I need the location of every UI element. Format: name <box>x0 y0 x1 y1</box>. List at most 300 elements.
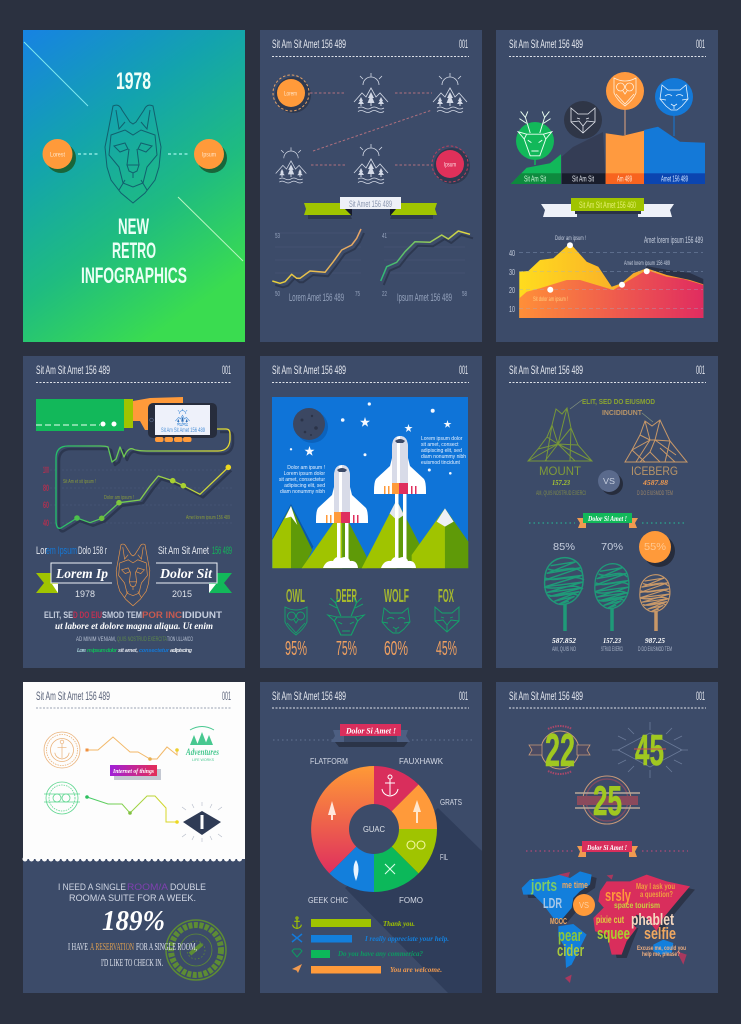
data points <box>547 242 650 293</box>
legend row: commerica: Do you have any commerica? <box>337 949 423 958</box>
typography: headline <box>44 610 222 621</box>
icon: feather <box>354 860 358 881</box>
ribbon heading <box>577 841 638 857</box>
word: MOOC: MOOC <box>550 917 567 926</box>
panel header <box>272 37 469 56</box>
dotted divider <box>529 522 686 524</box>
segment labels: GRATS <box>440 797 462 807</box>
chart grid <box>275 233 465 273</box>
typography: colored line: consectetur <box>139 648 170 654</box>
percentages: 45% <box>436 638 457 660</box>
percentages: 60% <box>384 638 408 660</box>
icon: wolf head <box>105 105 161 203</box>
area: yellow <box>519 243 703 318</box>
word: me time: me time <box>562 880 588 890</box>
text block left: Dolor am ipsum ! <box>287 465 325 471</box>
panel: rockets and animal percentages: 001 <box>459 363 468 377</box>
percentages: 75% <box>336 638 357 660</box>
panel: hand, cable chart and typography: 100 <box>43 465 49 475</box>
ribbon heading: Dolor Si Amet ! <box>587 515 627 523</box>
segment labels: FAUXHAWK <box>399 756 443 766</box>
tree captions: 157.23 <box>603 637 621 645</box>
heading left: Dolo 158 r <box>78 545 107 557</box>
badge: infinity <box>44 782 80 814</box>
typography: headline: POR INC <box>142 610 182 621</box>
axis labels <box>509 249 515 314</box>
axis labels: 80 <box>43 483 49 493</box>
bar: fox: Sit Am Sit <box>572 174 594 184</box>
text block left: diam nonummy nibh <box>280 489 325 495</box>
cover title: INFOGRAPHICS <box>81 263 187 288</box>
callout: left circle <box>42 139 76 173</box>
donut long shadow <box>345 808 482 993</box>
line chart: left <box>272 229 364 287</box>
typography: script line: ut labore et dolore magna aliqua. Ut enim <box>55 621 213 631</box>
text: reservation: FOR A SINGLE ROOM, <box>136 941 197 953</box>
heading right: 156 489 <box>212 545 232 557</box>
chart gridlines <box>50 470 232 523</box>
dotted divider <box>526 850 688 852</box>
ribbon heading: Sit Am Sit Amet 156 460 <box>579 200 636 210</box>
chart notes: Dolor am ipsum ! <box>104 495 134 501</box>
text: reservation: A RESERVATION <box>90 941 134 953</box>
panel: rockets and animal percentages: DEER <box>336 586 357 606</box>
segment labels: FIL <box>440 852 448 862</box>
chart labels: Ipsum Amet 156 489 <box>397 292 452 304</box>
word: squee: squee <box>597 924 630 943</box>
panel background <box>496 356 718 668</box>
text: reservation <box>68 941 197 969</box>
words: May I ask you: a question? <box>640 890 673 899</box>
legend row: appreciate: I really appreciate your help. <box>364 934 449 943</box>
panel header: Sit Am Sit Amet 156 489 <box>272 37 346 51</box>
ribbon heading <box>304 197 437 219</box>
panel: mountain flow and line charts: 001 <box>459 37 468 51</box>
chart gridlines <box>519 253 703 308</box>
cable line <box>56 429 230 528</box>
panel background <box>496 682 718 993</box>
chart labels: 75 <box>355 291 360 298</box>
chart notes: Amet lorem ipsum 156 489 <box>186 515 230 521</box>
label: mount: AM, QUIS NOSTRUD EXERCI <box>536 491 586 497</box>
axis labels: 10 <box>509 305 515 314</box>
panel header <box>36 689 232 708</box>
bar: wolf <box>644 78 705 184</box>
bar: fox <box>562 101 606 184</box>
panel background <box>23 682 245 993</box>
hand <box>133 397 183 430</box>
panel header: Sit Am Sit Amet 156 489 <box>36 363 110 377</box>
bar: owl: Am 489 <box>617 174 632 184</box>
versus badge <box>573 894 595 916</box>
segment: fauxhawk <box>374 766 418 829</box>
ribbon heading: Sit Amet 156 489 <box>349 199 392 209</box>
ribbon heading: Dolor Si Amet ! <box>345 726 396 736</box>
label: mount: MOUNT <box>539 464 582 478</box>
legend row: thank you: Thank you. <box>383 919 415 928</box>
highlight circle: 55% <box>644 541 666 553</box>
scalloped edge <box>25 856 245 862</box>
chart shadow <box>646 266 703 290</box>
area: red <box>519 270 703 318</box>
typography: headline: D DO EIU <box>73 610 102 621</box>
text: reservation: I HAVE <box>68 941 88 953</box>
percent labels <box>553 541 623 553</box>
timeline: green <box>85 795 179 824</box>
panel: rockets and animal percentages <box>260 356 482 668</box>
icon: large tree <box>328 801 336 820</box>
text: single room: ROOM/A <box>127 882 169 893</box>
chart labels: Lorem Amet 156 489 <box>289 292 344 304</box>
panel background <box>260 356 482 668</box>
panel: mountain flow and line charts <box>260 30 482 342</box>
cover year: 1978 <box>116 68 151 95</box>
panel header: Sit Am Sit Amet 156 489 <box>509 689 583 703</box>
segment labels <box>308 756 462 905</box>
heading left: em Ipsum <box>46 545 77 557</box>
badge: 25: 25 <box>593 777 622 824</box>
label: iceberg: D DO EIUSMOD TEM <box>637 491 673 497</box>
typography: colored line <box>77 648 193 654</box>
panel header: Sit Am Sit Amet 156 489 <box>509 363 583 377</box>
callout text: ELIT, SED DO EIUSMOD <box>582 397 655 406</box>
segment: fomo <box>374 829 418 892</box>
chart labels: 53 <box>275 233 280 240</box>
badge: adventures: Adventures <box>185 747 219 757</box>
tree captions: 587.852 <box>552 637 577 645</box>
cover gradient background <box>23 30 245 342</box>
badge: 22 <box>529 724 590 776</box>
callout text <box>582 397 655 417</box>
panel: animal bars and area chart: 001 <box>696 37 705 51</box>
text block right <box>421 436 466 466</box>
badge: 45: 45 <box>635 726 664 775</box>
line chart: right <box>381 231 473 285</box>
illustration: rocket launch scene <box>272 397 468 568</box>
badge: 45 <box>612 722 688 778</box>
panel: donut chart <box>260 682 482 993</box>
typography: colored line: Lore <box>77 648 86 654</box>
tree captions: 987.25 <box>645 637 666 645</box>
axis labels: 60 <box>43 500 49 510</box>
percentages: 95% <box>285 638 307 660</box>
badge: 22: 22 <box>545 724 575 776</box>
text: single room <box>58 882 206 904</box>
eurasia <box>598 875 690 931</box>
heading left <box>36 545 107 557</box>
text: single room: DOUBLE <box>170 882 206 893</box>
text block left <box>279 465 325 495</box>
panel background <box>260 30 482 342</box>
text block right: adipiscing elit, sed <box>421 448 462 454</box>
versus badge: VS <box>579 901 589 910</box>
heading right: Sit Am Sit Amet <box>158 545 209 557</box>
panel header: Sit Am Sit Amet 156 489 <box>36 689 110 703</box>
axis labels <box>43 465 49 528</box>
phone: Sit Am Sit Amet 156 489 <box>161 427 205 434</box>
bar: deer <box>511 111 561 184</box>
panel: white badges and room text <box>23 682 245 993</box>
chart labels: 41 <box>382 233 387 240</box>
icon: glasses <box>407 841 425 849</box>
axis labels: 30 <box>509 268 515 277</box>
words: May I ask you <box>636 882 675 899</box>
typography: small caps line: TION ULLAMCO <box>167 636 193 643</box>
ribbon heading: Dolor Si Amet ! <box>586 844 627 852</box>
tree: first <box>544 558 584 631</box>
ribbon heading <box>331 724 410 747</box>
segment: grats <box>374 784 437 829</box>
panel header <box>509 363 706 382</box>
callout: red circle <box>432 146 470 184</box>
axis labels: 20 <box>509 286 515 295</box>
center label: GUAC <box>363 825 385 834</box>
diagonal accent lines <box>24 42 88 106</box>
chart notes <box>63 479 230 521</box>
typography: headline: ELIT, SE <box>44 610 73 621</box>
years <box>75 589 192 599</box>
versus badge: VS <box>603 477 615 486</box>
second diagonal accent line <box>178 197 243 261</box>
ribbon tails <box>36 573 232 593</box>
label: iceberg: ICEBERG <box>631 464 678 478</box>
cable shadow <box>59 432 233 531</box>
panel background <box>23 356 245 668</box>
word: LDR: LDR <box>543 895 562 912</box>
dotted divider <box>273 739 472 741</box>
chart labels: 22 <box>382 291 387 298</box>
tree captions <box>552 637 672 653</box>
bar: deer: Sit Am Sit <box>524 174 546 184</box>
tag: internet of things <box>110 765 161 780</box>
words: excuse me <box>637 945 686 958</box>
icon: tree <box>413 800 421 823</box>
badge: adventures: LIFE WORKS <box>192 757 214 762</box>
label: iceberg: 4587.88 <box>642 479 669 487</box>
white section <box>23 682 245 859</box>
badge: adventures <box>185 726 219 762</box>
label: mount <box>536 464 586 497</box>
north america <box>522 871 592 920</box>
percent labels: 85% <box>553 541 575 553</box>
tree captions: AM, QUIS NO <box>552 647 576 653</box>
segment: geek chic <box>330 829 374 892</box>
sky <box>272 397 468 568</box>
callout: orange circle: Lorem <box>284 92 297 98</box>
icons: mountain emblems <box>276 73 467 184</box>
tree: second <box>595 564 629 631</box>
segment labels: FOMO <box>399 895 423 905</box>
rocket right <box>374 436 426 494</box>
banner right <box>156 563 217 583</box>
panel: number badges and word map: 001 <box>696 689 705 703</box>
sleeve <box>36 399 124 431</box>
panel: rockets and animal percentages: WOLF <box>384 586 409 606</box>
text block left: Lorem ipsum dolor <box>284 471 325 477</box>
banner right: Dolor Sit <box>159 567 213 582</box>
panel header <box>36 363 232 382</box>
flow connectors <box>310 93 432 165</box>
stamp <box>166 920 226 980</box>
word cloud <box>530 876 686 960</box>
banner left <box>51 563 112 583</box>
typography: small caps line <box>76 636 193 643</box>
rocket left <box>316 465 368 523</box>
years: 2015 <box>172 589 192 599</box>
donut hole <box>349 804 399 854</box>
segment labels: GEEK CHIC <box>308 895 348 905</box>
map shadow <box>527 875 695 958</box>
axis labels: 40 <box>43 518 49 528</box>
mountains <box>272 500 468 568</box>
panel: number badges and word map <box>496 682 718 993</box>
south america <box>558 924 587 968</box>
word: srsly: srsly <box>605 886 631 905</box>
exhaust columns <box>337 494 406 560</box>
text block right: Lorem ipsum dolor <box>421 436 463 442</box>
callout: right circle: Ipsum <box>202 152 216 158</box>
versus badge <box>598 470 623 495</box>
panel: white badges and room text: 001 <box>222 689 231 703</box>
callout: right circle <box>194 139 227 173</box>
legend row: welcome: You are welcome. <box>390 965 442 974</box>
panel: animal bars and area chart <box>496 30 718 342</box>
callout: red circle: Ipsum <box>444 162 456 168</box>
panel: rockets and animal percentages: OWL <box>286 586 305 606</box>
percentages <box>285 638 457 660</box>
label: mount: 157.23 <box>552 479 570 487</box>
tree captions: D DO EIUSMOD TEM <box>638 647 672 653</box>
area chart <box>509 235 703 318</box>
panel header: Sit Am Sit Amet 156 489 <box>272 689 346 703</box>
words: May I ask you: May I ask you <box>636 882 675 891</box>
segment: fil <box>374 829 437 874</box>
icons: animal heads <box>285 598 459 635</box>
panel: hand, cable chart and typography: 001 <box>222 363 231 377</box>
words: excuse me: help me, please? <box>642 951 680 958</box>
words: excuse me: Excuse me, could you <box>637 945 686 952</box>
panel header <box>272 689 469 708</box>
icon: polygon mountain <box>528 408 592 461</box>
cuff <box>124 399 133 428</box>
percent labels: 70% <box>601 541 623 553</box>
bar: wolf: Amet 156 489 <box>661 174 688 184</box>
panel header <box>509 689 706 708</box>
icon: orange wolf <box>116 544 150 606</box>
legend row: appreciate <box>292 934 449 943</box>
text block left: adipiscing elit, sed <box>284 483 325 489</box>
text block right: euismod tincidunt <box>421 460 461 466</box>
tag: internet of things: Internet of things <box>112 768 154 775</box>
legend row: thank you <box>293 917 415 928</box>
panel background <box>496 30 718 342</box>
ribbon heading <box>541 198 674 217</box>
panel: cover <box>23 30 245 342</box>
text: reservation: I'D LIKE TO CHECK IN. <box>101 957 163 969</box>
australia <box>653 940 673 955</box>
panel: donut chart: 001 <box>459 689 468 703</box>
panel header: Sit Am Sit Amet 156 489 <box>272 363 346 377</box>
chart points <box>74 464 231 521</box>
donut chart <box>311 766 437 892</box>
highlight circle <box>639 531 675 567</box>
typography: colored line: adipiscing <box>170 648 193 654</box>
connector dashes <box>78 153 188 155</box>
exhaust clouds <box>323 557 416 568</box>
panel: rockets and animal percentages: FOX <box>438 586 454 606</box>
panel: mount versus iceberg and trees: 001 <box>696 363 705 377</box>
label: iceberg <box>631 464 678 497</box>
bar: owl <box>606 72 644 184</box>
cover title <box>81 214 187 288</box>
word: jorts: jorts <box>530 876 557 895</box>
callout: orange circle <box>273 75 311 113</box>
chart callouts <box>533 235 703 303</box>
banner left: Lorem Ip <box>55 567 108 582</box>
icon: anchor <box>382 775 398 796</box>
phone <box>148 403 217 438</box>
text: single room: I NEED A SINGLE <box>58 882 126 893</box>
legend row: welcome <box>292 964 442 974</box>
word: pear: pear <box>558 926 582 945</box>
chart callouts: Sit dolor am ipsum ! <box>533 296 568 303</box>
text block right: sit amet, consect <box>421 442 459 448</box>
text block left: sit amet, consectetur <box>279 477 325 483</box>
text: single room: ROOM/A SUITE FOR A WEEK. <box>69 893 196 904</box>
tree: third <box>640 575 670 631</box>
typography: headline: SMOD TEM <box>102 610 142 621</box>
panel header <box>272 363 469 382</box>
segment: platform <box>311 766 374 874</box>
chart labels <box>275 233 467 304</box>
word: phablet: phablet <box>631 910 674 929</box>
sleeve stitching <box>36 424 100 426</box>
fingers <box>155 437 192 442</box>
africa <box>593 908 637 955</box>
callout: left circle: Lorest <box>50 152 65 158</box>
typography: colored line: m ipsum dolor <box>87 648 118 654</box>
word: space tourism: space tourism <box>614 900 660 910</box>
segment labels: FLATFORM <box>310 756 348 766</box>
heading left: Lor <box>36 545 47 557</box>
badge: diamond <box>182 802 222 842</box>
callout leaders <box>570 400 653 422</box>
cover title: NEW <box>118 214 149 239</box>
typography: small caps line: QUIS NOSTRUD EXERCITA <box>117 636 167 643</box>
word: pixie cut: pixie cut <box>596 915 624 926</box>
word: selfie: selfie <box>644 924 676 943</box>
panel header: Sit Am Sit Amet 156 489 <box>509 37 583 51</box>
panel header <box>509 37 706 56</box>
world map <box>522 871 695 983</box>
sleeve buttons <box>100 422 116 426</box>
panel background <box>260 682 482 993</box>
cover title: RETRO <box>112 238 156 263</box>
statistic: 189%: 189% <box>102 906 165 937</box>
badge: anchor <box>44 732 80 768</box>
chart callouts: Amet lorem ipsum 156 489 <box>624 260 670 267</box>
timeline: orange <box>86 737 179 761</box>
axis labels: 40 <box>509 249 515 258</box>
chart labels: 50 <box>275 291 280 298</box>
word: cider: cider <box>557 941 584 960</box>
illustration: arm holding phone <box>36 397 217 442</box>
years: 1978 <box>75 589 95 599</box>
cable line chart <box>56 429 233 531</box>
moon <box>293 408 328 443</box>
typography: small caps line: AD MINIM VENIAM, <box>76 636 116 643</box>
panel: mount versus iceberg and trees <box>496 356 718 668</box>
